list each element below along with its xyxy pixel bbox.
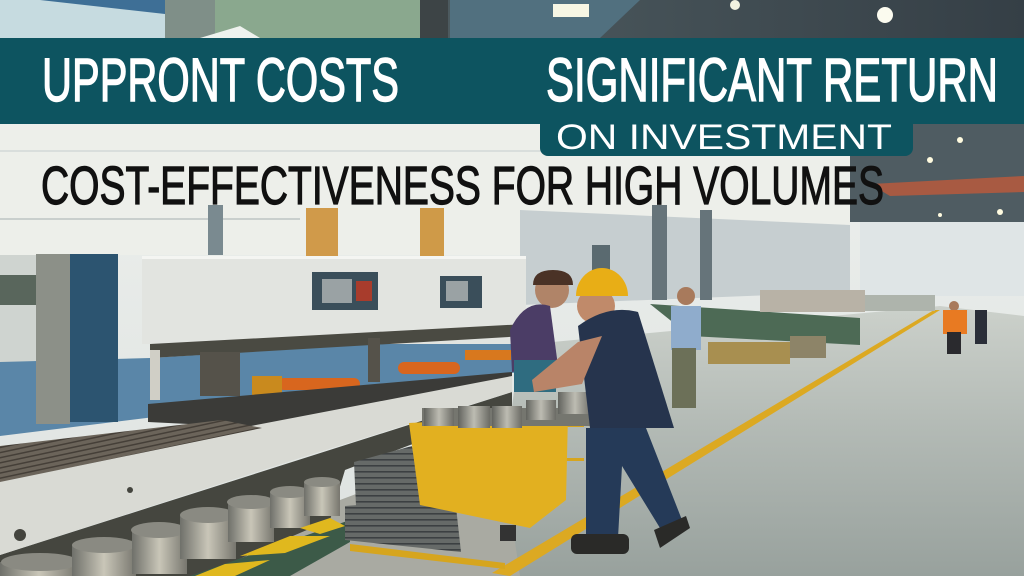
background worker in blue shirt: [671, 287, 701, 408]
worker in purple shirt: [510, 270, 573, 392]
distant racks and pallets: [650, 290, 935, 364]
floor cups: [0, 477, 350, 576]
stacked metal blocks: [345, 446, 461, 552]
banner: teal band: [0, 38, 1024, 124]
floor: [490, 306, 1024, 576]
left wall: [0, 125, 850, 255]
subheading tab: on investment: ON INVESTMENT: [556, 118, 892, 157]
distant worker in orange: [943, 301, 987, 354]
yellow floor line: [492, 310, 940, 576]
machine: press: [36, 254, 526, 428]
ceiling right: [850, 124, 1024, 222]
conveyor bed: [0, 376, 512, 576]
worker with yellow helmet: [532, 268, 690, 554]
heading: upfront costs: UPPRONT COSTS: [42, 46, 399, 114]
yellow bin with parts: [409, 392, 594, 541]
